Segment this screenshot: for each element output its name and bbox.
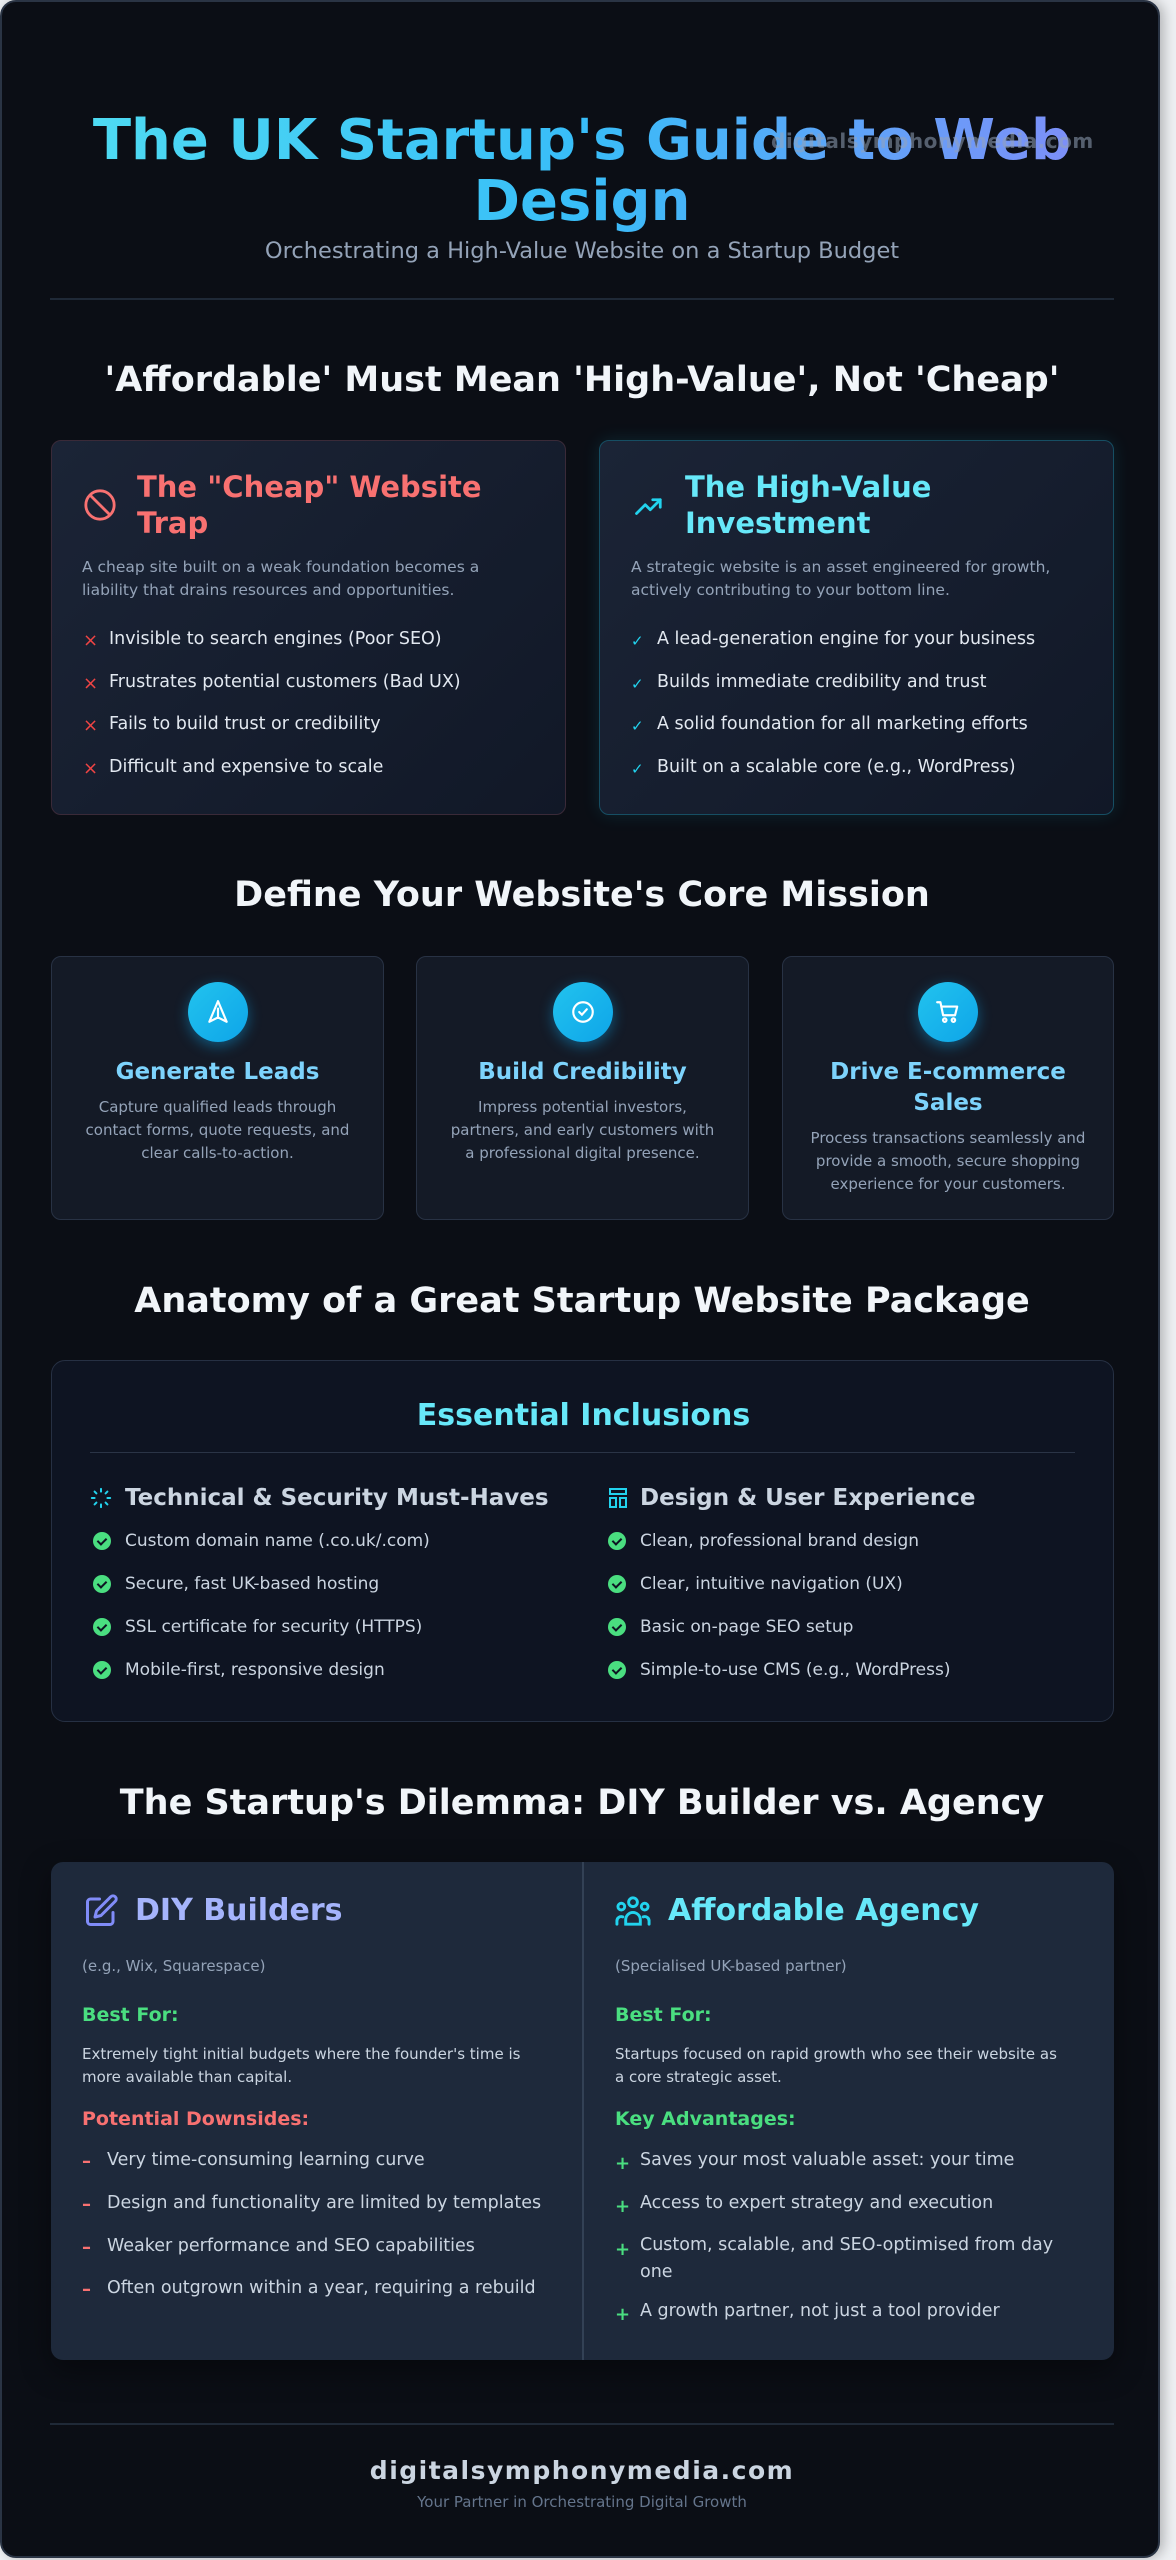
list: ✓ (631, 717, 644, 735)
column: DIY: Weaker performance and SEO capabilities (107, 2236, 475, 2256)
heading: dilemma: The Startup's Dilemma: DIY Builder vs. Agency (120, 1783, 1044, 1823)
subtitle: Orchestrating a High-Value Website on a Startup Budget (265, 238, 899, 264)
column: agency: + (615, 2304, 630, 2325)
panel: e-commerce (782, 956, 1114, 1220)
column: agency: Access to expert strategy and execution (640, 2193, 993, 2213)
list: Invisible to search engines (Poor SEO) (109, 629, 442, 649)
column: DIY: (e.g., Wix, Squarespace) (82, 1957, 265, 1975)
column: agency: + (615, 2196, 630, 2217)
heading: The High-Value (685, 470, 931, 504)
column: DIY: Extremely tight initial budgets where the founder's time is more available than capital. (82, 2045, 520, 2086)
column: design: Design & User Experience (640, 1485, 976, 1511)
column: agency: Affordable Agency (668, 1893, 979, 1928)
column: DIY (82, 1893, 541, 2300)
column: DIY: – (82, 2237, 91, 2258)
column: agency: Custom, scalable, and SEO-optimised from day one (640, 2235, 1053, 2282)
heading: The "Cheap" Website (137, 470, 482, 504)
column: DIY: – (82, 2194, 91, 2215)
column: technical: Custom domain name (.co.uk/.com) (125, 1531, 430, 1551)
heading (685, 470, 931, 540)
column: technical: Technical & Security Must-Haves (125, 1485, 549, 1511)
icon: cart (918, 982, 978, 1042)
list: ✓ (631, 760, 644, 778)
column: technical: SSL certificate for security (HTTPS) (125, 1617, 422, 1637)
list: Fails to build trust or credibility (109, 714, 381, 734)
panel: generate leads (51, 956, 384, 1220)
description: A cheap site built on a weak foundation becomes a liability that drains resources and opportunities. (82, 558, 479, 599)
panel: high-value (599, 440, 1114, 815)
icon: send (188, 982, 248, 1042)
column: design (608, 1485, 976, 1680)
column: DIY: – (82, 2279, 91, 2300)
list: A solid foundation for all marketing efforts (657, 714, 1028, 734)
icon: ban (84, 489, 116, 521)
column: DIY: Potential Downsides: (82, 2108, 309, 2130)
list: × (83, 673, 98, 694)
list: Frustrates potential customers (Bad UX) (109, 672, 461, 692)
list: × (83, 715, 98, 736)
column: technical: Secure, fast UK-based hosting (125, 1574, 379, 1594)
panel: build credibility: Build Credibility (478, 1059, 687, 1085)
panel: e-commerce: Process transactions seamlessly and provide a smooth, secure shopping experience for your customers. (811, 1129, 1085, 1193)
description: A strategic website is an asset engineered for growth, actively contributing to your bottom line. (631, 558, 1050, 599)
heading: core mission: Define Your Website's Core Mission (234, 875, 930, 915)
panel: build credibility: Impress potential investors, (478, 1098, 687, 1116)
column: design: Basic on-page SEO setup (640, 1617, 853, 1637)
column: DIY: Often outgrown within a year, requiring a rebuild (107, 2278, 536, 2298)
column: agency: Best For: (615, 2004, 712, 2026)
panel: generate leads: Capture qualified leads through contact forms, quote requests, and clear calls-to-action. (86, 1098, 349, 1162)
panel: build credibility: a professional digital presence. (465, 1144, 700, 1162)
column: DIY: Best For: (82, 2004, 179, 2026)
title: The UK Startup's Guide to Web Design (93, 108, 1071, 234)
column: agency: Saves your most valuable asset: your time (640, 2150, 1014, 2170)
column: agency (615, 1893, 1057, 2325)
column: agency: a core strategic asset. (615, 2068, 782, 2086)
list: Difficult and expensive to scale (109, 757, 383, 777)
list: Builds immediate credibility and trust (657, 672, 986, 692)
heading: affordable: 'Affordable' Must Mean 'High-Value', Not 'Cheap' (105, 360, 1059, 400)
panel: generate leads: Generate Leads (116, 1059, 319, 1085)
heading: Investment (685, 506, 871, 540)
column: agency: Key Advantages: (615, 2108, 796, 2130)
panel: cheap trap (51, 440, 566, 815)
icon: badge check (552, 982, 612, 1042)
list: Built on a scalable core (e.g., WordPress) (657, 757, 1016, 777)
column: DIY: DIY Builders (135, 1893, 342, 1928)
icon: trending up (635, 498, 662, 515)
column: design: Clean, professional brand design (640, 1531, 919, 1551)
icon: loader (90, 1488, 112, 1508)
column: DIY: – (82, 2151, 91, 2172)
column: design: Clear, intuitive navigation (UX) (640, 1574, 903, 1594)
heading (137, 470, 482, 540)
panel: build credibility: partners, and early customers with (451, 1121, 714, 1139)
panel: e-commerce: Drive E-commerce (830, 1059, 1066, 1085)
icon: edit (86, 1894, 118, 1926)
icon: layout (609, 1488, 627, 1508)
column: technical (90, 1485, 549, 1680)
list (83, 629, 461, 779)
icon: users (615, 1896, 651, 1926)
column: agency: + (615, 2239, 630, 2260)
heading: anatomy: Anatomy of a Great Startup Website Package (134, 1281, 1030, 1321)
column: technical: Mobile-first, responsive design (125, 1660, 385, 1680)
list: × (83, 630, 98, 651)
column: agency: (Specialised UK-based partner) (615, 1957, 847, 1975)
panel: e-commerce: Sales (913, 1090, 983, 1116)
column: agency: A growth partner, not just a tool provider (640, 2301, 1000, 2321)
heading: Trap (137, 506, 208, 540)
list (631, 629, 1035, 778)
list: × (83, 758, 98, 779)
list: ✓ (631, 675, 644, 693)
watermark: digitalsymphonymedia.com (771, 129, 1094, 153)
column: DIY: Design and functionality are limited by templates (107, 2193, 541, 2213)
footer tagline: Your Partner in Orchestrating Digital Growth (417, 2493, 747, 2511)
subheading: Essential Inclusions (417, 1398, 750, 1433)
panel: build credibility (416, 956, 749, 1220)
column: design: Simple-to-use CMS (e.g., WordPress) (640, 1660, 950, 1680)
footer brand: digitalsymphonymedia.com (370, 2456, 794, 2485)
list: ✓ (631, 632, 644, 650)
column: agency: + (615, 2153, 630, 2174)
panel: essential inclusions (51, 1360, 1114, 1722)
column: agency: Startups focused on rapid growth who see their website as (615, 2045, 1057, 2063)
column: DIY: Very time-consuming learning curve (107, 2150, 425, 2170)
panel: comparison (51, 1862, 1114, 2360)
list: A lead-generation engine for your business (657, 629, 1035, 649)
